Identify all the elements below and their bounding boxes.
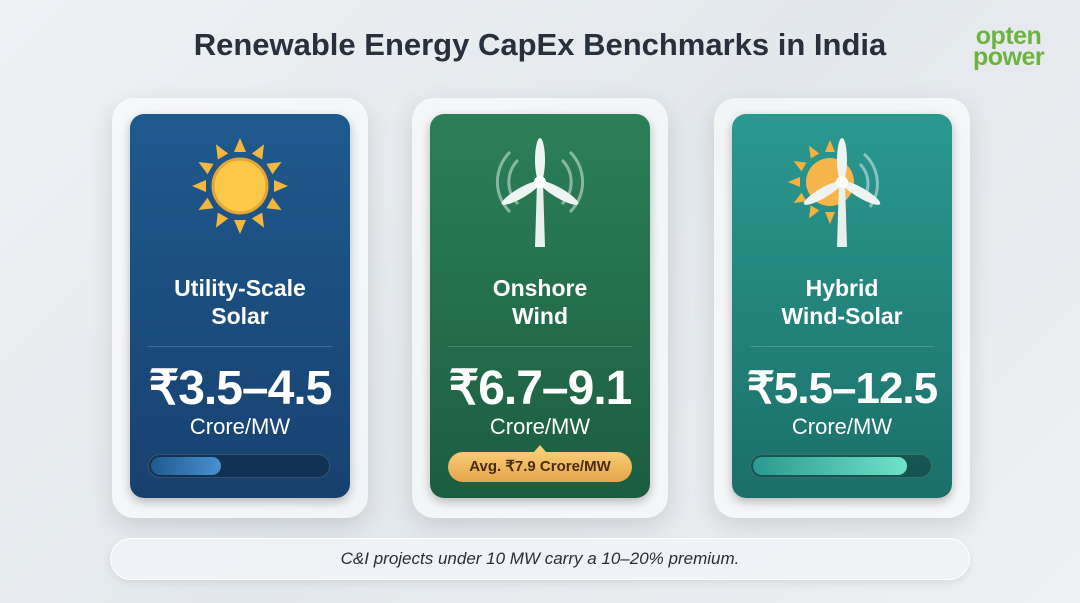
panel: hybrid (714, 98, 970, 518)
callout: average: Avg. ₹7.9 Crore/MW (469, 458, 611, 475)
price: ₹3.5–4.5 (149, 362, 331, 415)
label: Wind-Solar (781, 303, 903, 329)
panel: wind: Crore/MW (490, 414, 590, 439)
label (174, 275, 306, 329)
title: Renewable Energy CapEx Benchmarks in India (194, 27, 886, 62)
callout: average (448, 452, 632, 482)
label (781, 275, 903, 329)
footer note (110, 538, 970, 580)
price: ₹6.7–9.1 (449, 362, 631, 415)
label: Hybrid (806, 275, 878, 301)
label: Onshore (493, 275, 587, 301)
range bar (148, 454, 330, 478)
label: Wind (512, 303, 568, 329)
icon: sun + turbine (788, 138, 880, 247)
icon: sun (192, 138, 288, 234)
icon: wind turbine (496, 138, 584, 247)
price: ₹5.5–12.5 (747, 364, 937, 413)
panel: wind (412, 98, 668, 518)
panel: hybrid: Crore/MW (792, 414, 892, 439)
panel: solar: Crore/MW (190, 414, 290, 439)
label (493, 275, 587, 329)
label: Solar (211, 303, 269, 329)
label: Utility-Scale (174, 275, 306, 301)
logo: opten (976, 22, 1041, 50)
logo: power (973, 43, 1044, 71)
logo (973, 22, 1044, 71)
range bar (750, 454, 932, 478)
footer note: C&I projects under 10 MW carry a 10–20% premium. (341, 549, 739, 568)
panel: solar (112, 98, 368, 518)
